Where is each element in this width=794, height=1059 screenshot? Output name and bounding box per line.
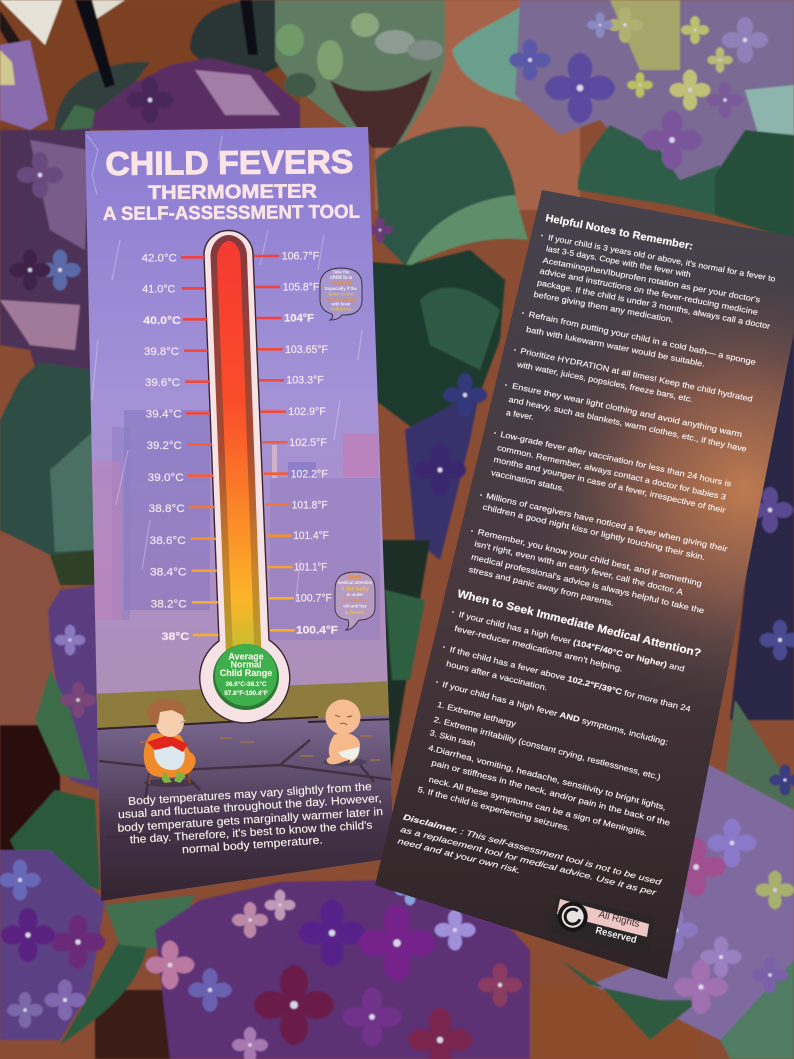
heading: helpful notes: Helpful Notes to Remember:	[544, 212, 694, 253]
Fahrenheit scale labels: 106.7°F	[282, 251, 319, 263]
helpful notes list: Low-grade fever after vaccination for less than 24 hours is	[500, 430, 732, 489]
medical attention list	[417, 610, 692, 838]
helpful notes list: bath with lukewarm water would be suitable.	[525, 325, 706, 369]
leaves centre	[375, 126, 516, 270]
helpful notes list: Prioritize HYDRATION at all times! Keep the child hydrated	[520, 346, 753, 404]
top right flower mass	[515, 0, 794, 185]
medical attention list: 4.Diarrhea, vomiting, headache, sensitivity to bright lights,	[427, 743, 667, 812]
Celsius scale labels: 38.2°C	[151, 599, 187, 611]
Celsius scale labels: 38.4°C	[150, 567, 187, 579]
Fahrenheit scale labels: 103.3°F	[286, 375, 324, 387]
medical attention list: 1. Extreme lethargy	[436, 700, 517, 729]
helpful notes list: children a good night kiss or lightly touching their skin.	[482, 502, 706, 562]
Fahrenheit scale labels: 101.4°F	[293, 530, 329, 542]
medical attention list: If your child has a high fever AND symptoms, including:	[441, 680, 669, 747]
helpful notes list: isn't right, even with an early fever, call the doctor. A	[474, 539, 685, 597]
temperature ticks	[181, 256, 295, 635]
medical attention list: If your child has a high fever (104°F/40°C or higher) and	[458, 610, 685, 674]
callout: take the child to a hospital: coming down	[326, 297, 357, 303]
callout: seek medical attention: if the baby	[341, 586, 370, 592]
callout: seek medical attention: medical attention	[338, 580, 373, 585]
Celsius scale labels: 39.0°C	[148, 472, 184, 484]
panel: right card, notes and guidance	[375, 190, 794, 979]
title	[103, 143, 360, 225]
Celsius scale labels	[142, 253, 189, 643]
helpful notes list: Ensure they wear light clothing and avoid anything warm	[511, 381, 743, 439]
callout: take the child to a hospital: with fever	[330, 302, 351, 306]
Fahrenheit scale labels: 102.2°F	[291, 469, 328, 481]
succulent pot	[275, 0, 445, 145]
callout: take the child to a hospital: Especially if the	[325, 286, 357, 291]
Celsius scale labels: 39.2°C	[147, 440, 182, 452]
copyright badge: All Rights	[597, 909, 641, 930]
wood zones	[0, 0, 300, 130]
helpful notes list: before giving them any medication.	[533, 290, 674, 325]
callout: take the child to a hospital: reducers	[331, 306, 351, 312]
disclaimer: Disclaimer. : This self-assessment tool is not to be used	[402, 813, 663, 887]
medical attention list: 2. Extreme irritability (constant crying, restlessness, etc.)	[433, 715, 662, 782]
body temperature note: the day. Therefore, it's best to know the child's	[129, 819, 373, 846]
Celsius scale labels: 39.6°C	[145, 377, 180, 389]
body temperature note: normal body temperature.	[182, 834, 323, 856]
green normal-range bulb: 97.8°F-100.4°F	[224, 689, 268, 697]
helpful notes list: medical professional's advice is always helpful to take the	[470, 552, 706, 616]
left of right card	[405, 390, 480, 560]
Celsius scale labels: 38°C	[162, 631, 189, 643]
medical attention list: pain or stiffness in the neck, and/or pain in the back of the	[431, 758, 672, 828]
disclaimer: as a replacement tool for medical advice. Use it as per	[400, 825, 657, 897]
helpful notes list: with water, juices, popsicles, freeze bars, etc.	[515, 360, 694, 404]
helpful notes list: If your child is 3 years old or above, it's normal for a fever to	[547, 233, 777, 284]
thermometer	[200, 230, 290, 723]
body temperature note: body temperature gets marginally warmer later in	[117, 806, 383, 835]
medical attention list: fever-reducer medications aren't helping.	[454, 624, 624, 674]
helpful notes list: months and younger in case of a fever, irrespective of their	[493, 455, 727, 515]
helpful notes list: common. Remember, always contact a doctor for babies 3	[496, 443, 727, 502]
medical attention list: hours after a vaccination.	[445, 659, 548, 693]
callout: seek medical attention: 3 months	[343, 598, 367, 604]
callout: seek medical attention: old and has	[343, 604, 367, 608]
helpful notes list	[468, 233, 777, 616]
green normal-range bulb: Normal	[230, 660, 262, 670]
helpful notes list: package. If the child is under 3 months, always call a doctor	[536, 278, 771, 331]
Celsius scale labels: 42.0°C	[142, 253, 177, 265]
copyright badge	[548, 895, 655, 957]
callout: seek medical attention: a fever.	[345, 610, 365, 616]
Fahrenheit scale labels: 100.4°F	[296, 624, 338, 636]
body temperature note: usual and fluctuate throughout the day. However,	[118, 793, 382, 821]
copyright badge: Reserved	[594, 925, 638, 946]
medical attention list: 5. If the child is experiencing seizures.	[417, 785, 571, 833]
callout: seek medical attention: is under	[347, 592, 364, 597]
callout: take the child to a hospital: child to a	[330, 275, 352, 281]
Celsius scale labels: 39.4°C	[146, 408, 182, 420]
title: CHILD FEVERS	[105, 143, 354, 182]
helpful notes list: stress and panic away from parents.	[468, 565, 615, 608]
Fahrenheit scale labels: 101.8°F	[292, 499, 328, 511]
callout: seek medical attention: Seek	[348, 575, 363, 581]
helpful notes list: Acetaminophen/Ibuprofen rotation as per your doctor's	[542, 256, 761, 305]
green normal-range bulb: Average	[228, 652, 264, 662]
Fahrenheit scale labels: 102.5°F	[289, 437, 327, 449]
callout: take the child to a hospital: fever is not	[328, 292, 354, 298]
body temperature note: Body temperatures may vary slightly from the	[128, 781, 372, 808]
panel: left card, thermometer tool	[85, 127, 394, 905]
Celsius scale labels: 38.6°C	[150, 535, 186, 547]
bottom flower mass	[155, 880, 530, 1059]
green normal-range bulb: 36.6°C-38.1°C	[225, 680, 267, 688]
Fahrenheit scale labels: 105.8°F	[283, 282, 319, 294]
medical attention list: 3. Skin rash	[429, 728, 477, 749]
title: A SELF-ASSESSMENT TOOL	[103, 202, 360, 225]
helpful notes list: Refrain from putting your child in a cold bath— a sponge	[528, 310, 757, 367]
disclaimer	[397, 813, 663, 897]
callout: take the child to a hospital: hospital	[331, 280, 352, 286]
Fahrenheit scale labels: 104°F	[284, 313, 314, 325]
disclaimer: need and at your own risk.	[397, 837, 521, 875]
Fahrenheit scale labels	[282, 251, 338, 636]
title: THERMOMETER	[148, 181, 317, 204]
body temperature note	[117, 781, 383, 856]
left side	[0, 40, 48, 130]
illustration: crying baby	[323, 700, 367, 766]
green leaves top right	[578, 125, 720, 215]
medical attention list: neck. All these symptoms can be a sign of Meningitis.	[428, 775, 648, 838]
helpful notes list: Millions of caregivers have noticed a fever when giving their	[485, 491, 729, 554]
window and poles	[0, 0, 62, 45]
Celsius scale labels: 41.0°C	[142, 284, 175, 296]
heading: when to seek attention: When to Seek Immediate Medical Attention?	[456, 588, 702, 660]
callout: seek medical attention	[335, 572, 375, 630]
medical attention list: If the child has a fever above 102.2°F/39°C for more than 24	[449, 645, 692, 714]
Celsius scale labels: 40.0°C	[143, 315, 181, 327]
Fahrenheit scale labels: 103.65°F	[285, 344, 328, 356]
callout: take the child to a hospital: Take the	[333, 270, 350, 274]
top centre teal leaf	[452, 0, 552, 107]
Celsius scale labels: 39.8°C	[144, 346, 179, 358]
helpful notes list: and heavy, such as blankets, warm clothes, etc., if they have	[508, 395, 748, 454]
illustration: sick child in armchair	[144, 699, 196, 787]
Fahrenheit scale labels: 102.9°F	[288, 406, 326, 418]
helpful notes list: last 3-5 days. Cope with the fever with	[545, 244, 692, 279]
Fahrenheit scale labels: 101.1°F	[294, 561, 327, 573]
helpful notes list: advice and instructions on the fever-reducing medicine	[539, 266, 759, 317]
helpful notes list: a fever.	[505, 408, 534, 422]
right side	[730, 230, 794, 720]
helpful notes list: vaccination status.	[490, 468, 565, 493]
callout: take the child to a hospital	[320, 268, 362, 320]
card backdrop: city, wall and pavement	[85, 135, 394, 905]
Celsius scale labels: 38.8°C	[149, 503, 185, 515]
Fahrenheit scale labels: 100.7°F	[295, 593, 332, 605]
helpful notes list: Remember, you know your child best, and if something	[477, 527, 703, 588]
green normal-range bulb: Child Range	[220, 668, 272, 678]
green normal-range bulb	[213, 644, 279, 710]
